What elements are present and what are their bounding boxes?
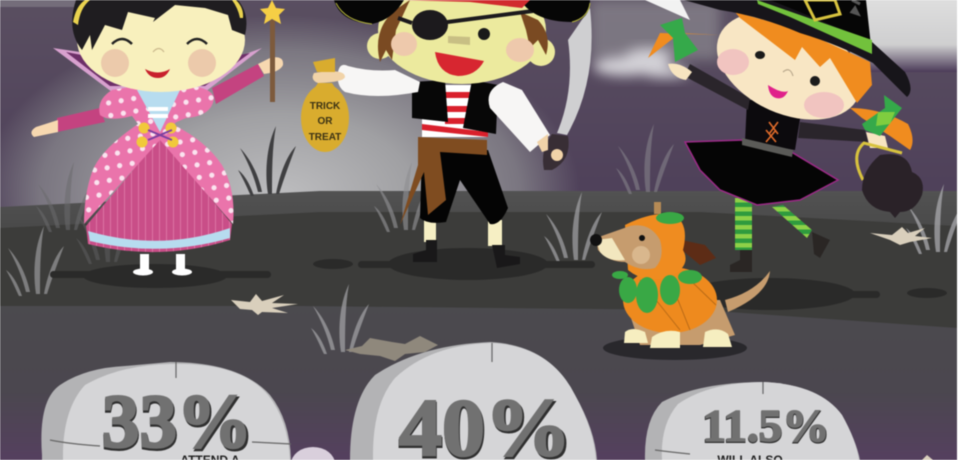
witch cauldron [857, 143, 923, 218]
treat bag: TRICK [310, 101, 341, 112]
pirate legs and boots [413, 218, 520, 268]
pirate left arm holding bag [313, 65, 420, 96]
fairy head [72, 0, 246, 92]
pirate hat [334, 0, 590, 24]
fairy wand [260, 0, 285, 102]
pirate sword [537, 8, 592, 170]
stat 11.5%: 11.5% [702, 401, 830, 452]
fairy arms and hands [31, 57, 283, 137]
witch hat [684, 0, 911, 97]
treat bag: OR [318, 116, 333, 127]
fairy bib [137, 90, 180, 132]
sky background [0, 0, 957, 240]
pirate head [367, 0, 555, 84]
fairy collar [53, 48, 262, 92]
witch legs and boots [730, 198, 830, 272]
ground: dark band [0, 212, 957, 340]
treat bag: TREAT [309, 132, 341, 143]
treat bag [301, 58, 349, 152]
pirate right arm [489, 82, 550, 152]
pirate pants [420, 150, 508, 224]
character: pirate [301, 0, 592, 268]
pirate shirt [422, 85, 488, 137]
label 11.5% fill: 11.5% [702, 400, 830, 451]
pumpkin costume [623, 267, 717, 333]
character: witch [648, 0, 923, 272]
dog tail [725, 271, 770, 312]
tombstone: 40% [350, 342, 597, 460]
shadows on ground [50, 248, 947, 310]
fairy buttons and bow [136, 122, 178, 148]
witch torso and belt [742, 100, 803, 157]
fairy skirt hem [88, 228, 230, 249]
small leaf tip at bottom right [922, 455, 933, 460]
witch left pigtail [648, 18, 720, 62]
pumpkin stem [654, 202, 661, 214]
dog head [590, 225, 662, 269]
pumpkin hood [625, 214, 686, 280]
fairy pleated skirt [86, 138, 232, 252]
ground: road [0, 306, 957, 460]
tombstone: 11.5% [645, 382, 860, 460]
dog paws [624, 329, 732, 348]
pirate vest [412, 80, 498, 134]
ground: back band [0, 191, 957, 240]
witch arms [668, 64, 888, 148]
dog ear [672, 238, 716, 265]
fairy bib stripes [148, 107, 168, 118]
witch head [700, 0, 878, 141]
pumpkin leaves [612, 212, 702, 313]
clouds [593, 48, 689, 78]
dog body [625, 300, 735, 345]
fairy overskirt and sleeves [84, 86, 234, 224]
grass tufts [6, 124, 960, 354]
fairy legs and shoes [133, 254, 192, 276]
witch right pigtail [850, 95, 913, 150]
dog shadow [603, 336, 747, 360]
character: dog in pumpkin costume [590, 202, 770, 360]
right-edge white strip [957, 0, 960, 460]
tombstone: 33% [41, 362, 291, 460]
character: fairy princess [31, 0, 285, 276]
fallen leaves [231, 227, 932, 361]
small ghost glow at bottom [291, 447, 335, 460]
witch skirt [685, 140, 838, 205]
pirate sash [400, 137, 487, 225]
